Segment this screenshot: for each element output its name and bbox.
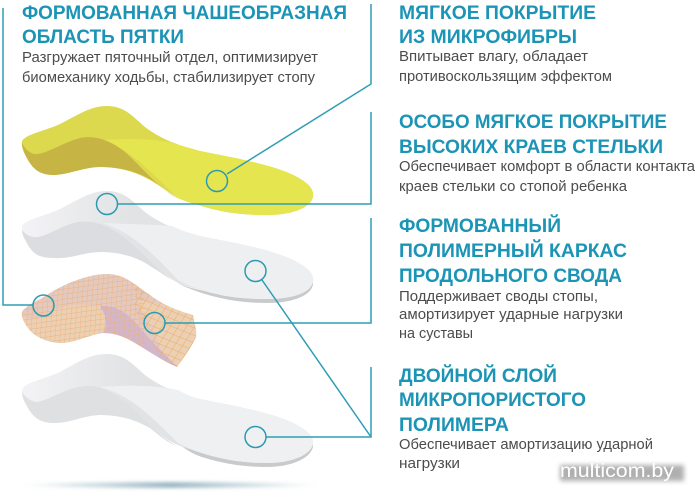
insole layer: double microporous polymer	[22, 354, 313, 467]
text block: polymer frame: амортизирует ударные нагрузки	[399, 307, 623, 323]
text block: soft high edges: ВЫСОКИХ КРАЕВ СТЕЛЬКИ	[399, 136, 663, 158]
text block: microfiber cover	[399, 2, 612, 85]
text block: microfiber cover: ИЗ МИКРОФИБРЫ	[399, 26, 577, 48]
text block: double microporous layer: ДВОЙНОЙ СЛОЙ	[399, 363, 557, 387]
text block: heel cup	[22, 2, 347, 86]
insole layer: yellow microfiber cover	[22, 106, 313, 215]
text block: heel cup: Разгружает пяточный отдел, оптимизирует	[22, 50, 318, 66]
text block: double microporous layer	[399, 363, 653, 472]
text block: double microporous layer: ПОЛИМЕРА	[399, 414, 509, 436]
text block: microfiber cover: МЯГКОЕ ПОКРЫТИЕ	[399, 2, 596, 24]
text block: polymer frame	[399, 213, 627, 342]
text block: polymer frame: на суставы	[399, 326, 473, 342]
watermark: multicom.by	[560, 461, 675, 482]
text block: soft high edges	[399, 111, 696, 195]
text block: microfiber cover: Впитывает влагу, обладает	[399, 49, 588, 65]
text block: microfiber cover: противоскользящим эффектом	[399, 69, 612, 85]
callout: double layer leader lines	[245, 260, 371, 448]
text block: polymer frame: ПОЛИМЕРНЫЙ КАРКАС	[399, 238, 627, 262]
text block: double microporous layer: нагрузки	[399, 456, 460, 472]
callout: high edges leader line	[96, 112, 371, 214]
callout: microfiber cover leader line	[206, 4, 371, 192]
text block: soft high edges: Обеспечивает комфорт в области контакта	[399, 159, 696, 175]
text block: heel cup: биомеханику ходьбы, стабилизирует стопу	[22, 70, 316, 86]
text block: soft high edges: краев стельки со стопой ребенка	[399, 179, 628, 195]
insole layer: white soft edge cover	[22, 191, 313, 303]
text block: double microporous layer: МИКРОПОРИСТОГО	[399, 389, 586, 411]
floor shadow	[20, 482, 320, 488]
text block: heel cup: ФОРМОВАННАЯ ЧАШЕОБРАЗНАЯ	[22, 2, 347, 24]
callout: polymer frame leader line	[144, 218, 371, 334]
text block: polymer frame: ФОРМОВАННЫЙ	[399, 213, 561, 237]
text block: heel cup: ОБЛАСТЬ ПЯТКИ	[22, 26, 184, 48]
text block: polymer frame: Поддерживает своды стопы,	[399, 289, 598, 305]
callout: heel cup leader line	[3, 8, 54, 316]
text block: double microporous layer: Обеспечивает амортизацию ударной	[399, 437, 653, 453]
text block: polymer frame: ПРОДОЛЬНОГО СВОДА	[399, 265, 622, 287]
insole layer: polymer mesh frame	[22, 274, 196, 367]
text block: soft high edges: ОСОБО МЯГКОЕ ПОКРЫТИЕ	[399, 111, 667, 133]
